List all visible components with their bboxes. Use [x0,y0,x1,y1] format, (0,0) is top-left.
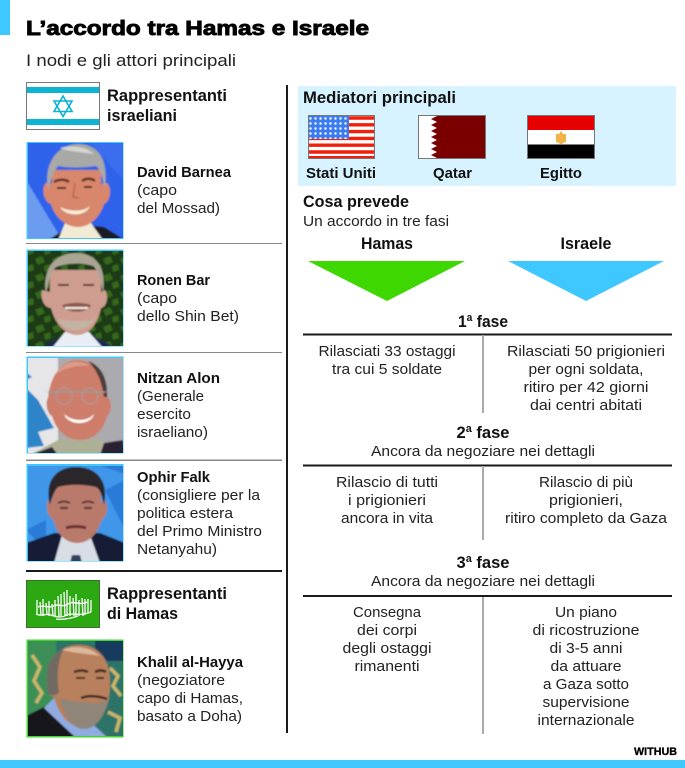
heading: Israeli representatives [107,86,227,125]
text: Khalil al-Hayya: basato a Doha) [137,708,242,725]
photo: Khalil al-Hayya [26,639,125,738]
text: phase 1 Israel [507,343,665,414]
photo: Ophir Falk [26,464,125,563]
heading: what it provides: Cosa prevede [303,192,409,211]
arrow: Hamas green [308,261,465,301]
person: Ronen Bar [26,249,239,348]
text: David Barnea [137,164,232,217]
heading: phase 2: 2ª fase [456,423,510,442]
arrow: Israel blue [508,261,664,301]
text: phase 1 Israel: dai centri abitati [530,397,642,414]
text: phase 3 Hamas [342,604,432,675]
text: phase 2 Hamas: i prigionieri [348,492,426,509]
heading: Hamas representatives: Rappresentanti [107,584,227,603]
photo: Ronen Bar [26,249,125,348]
text: phase 2 Hamas [336,474,438,527]
person: David Barnea [26,141,232,240]
text: Khalil al-Hayya: capo di Hamas, [137,690,243,707]
panel: phase 3 [303,553,672,734]
label: Hamas column: Hamas [361,234,413,253]
column separator [286,85,288,733]
bottom bar [0,760,685,768]
text: phase 3 Hamas: degli ostaggi [342,640,432,657]
text: Ronen Bar: dello Shin Bet) [137,308,239,325]
person: Nitzan Alon [26,356,220,455]
text: Nitzan Alon: israeliano) [137,424,208,441]
panel: phase 2 [303,423,672,540]
text: Khalil al-Hayya [137,654,244,725]
person: Ophir Falk [26,464,262,563]
heading: Israeli representatives: israeliani [107,106,177,125]
text: phase 1 Israel: ritiro per 42 giorni [524,379,648,396]
text: phase 2 Israel: ritiro completo da Gaza [505,510,668,527]
heading: Israeli representatives: Rappresentanti [107,86,227,105]
text: David Barnea: del Mossad) [137,200,220,217]
text: phase 1 Israel: Rilasciati 50 prigionieri [507,343,665,360]
heading: main mediators: Mediatori principali [303,88,456,107]
text: Ronen Bar [137,272,239,325]
text: Ophir Falk: Netanyahu) [137,541,217,558]
text: phase 3 Israel: da attuare [550,658,622,675]
text: Ophir Falk: del Primo Ministro [137,523,262,540]
text: phase 1 Hamas: Rilasciati 33 ostaggi [318,343,456,360]
panel: Israeli representatives [26,82,282,563]
text: Khalil al-Hayya: Khalil al-Hayya [137,654,244,671]
text: David Barnea: (capo [137,182,177,199]
text: Nitzan Alon: (Generale [137,388,204,405]
text: phase 3 Israel: internazionale [538,712,634,729]
heading: phase 1: 1ª fase [458,312,508,331]
photo: David Barnea [26,141,125,240]
text: phase 2 Israel: prigionieri, [549,492,623,509]
label: Israel column: Israele [560,234,612,253]
text: phase 1 Hamas: tra cui 5 soldate [332,361,442,378]
icon: Egypt flag [527,115,595,159]
text: phase 3 Israel: di 3-5 anni [550,640,622,657]
top accent bar [0,0,10,35]
text: phase 3 Israel: di ricostruzione [532,622,640,639]
text: Ronen Bar: (capo [137,290,177,307]
person: Khalil al-Hayya [26,639,244,738]
text: phase 3 note: Ancora da negoziare nei dettagli [371,573,595,590]
text: phase 2 Israel: Rilascio di più [539,474,633,491]
text: phase 3 Israel: Un piano [555,604,617,621]
text: Nitzan Alon: Nitzan Alon [137,370,220,387]
text: Nitzan Alon: esercito [137,406,191,423]
text: Khalil al-Hayya: (negoziatore [137,672,225,689]
text: agreement in three phases: Un accordo in tre fasi [303,213,449,230]
text: David Barnea: David Barnea [137,164,232,181]
heading: Hamas representatives [107,584,227,623]
text: Nitzan Alon [137,370,220,441]
text: phase 1 Hamas [318,343,456,378]
icon: Israel flag [26,82,100,130]
text: Ophir Falk: politica estera [137,505,234,522]
text: phase 2 Israel [505,474,668,527]
panel: Hamas representatives [26,580,244,738]
text: phase 3 Hamas: Consegna [353,604,422,621]
source credit: WITHUB [634,746,677,758]
label: Qatar: Qatar [433,165,472,182]
text: phase 2 Hamas: Rilascio di tutti [336,474,438,491]
heading: phase 3: 3ª fase [456,553,510,572]
label: Egitto: Egitto [540,165,582,182]
photo: Nitzan Alon [26,356,125,455]
title: L’accordo tra Hamas e Israele [26,17,369,40]
text: phase 1 Israel: per ogni soldata, [528,361,644,378]
text: phase 3 Israel: a Gaza sotto [543,676,629,693]
text: phase 3 Israel: supervisione [542,694,630,711]
heading: Hamas representatives: di Hamas [107,604,178,623]
icon: Hamas flag [26,580,100,628]
icon: USA flag [308,115,375,159]
label: Stati Uniti: Stati Uniti [306,165,376,182]
text: phase 3 Israel [532,604,640,729]
text: Ophir Falk: (consigliere per la [137,487,261,504]
text: phase 3 Hamas: dei corpi [357,622,417,639]
text: phase 2 note: Ancora da negoziare nei dettagli [371,443,595,460]
panel: phase 1 [303,312,672,414]
text: phase 3 Hamas: rimanenti [354,658,420,675]
text: Ronen Bar: Ronen Bar [137,272,210,289]
subtitle: I nodi e gli attori principali [26,52,236,70]
icon: Qatar flag [418,116,486,158]
panel: main mediators [298,86,676,186]
text: Ophir Falk: Ophir Falk [137,469,211,486]
text: phase 2 Hamas: ancora in vita [341,510,434,527]
text: Ophir Falk [137,469,262,558]
